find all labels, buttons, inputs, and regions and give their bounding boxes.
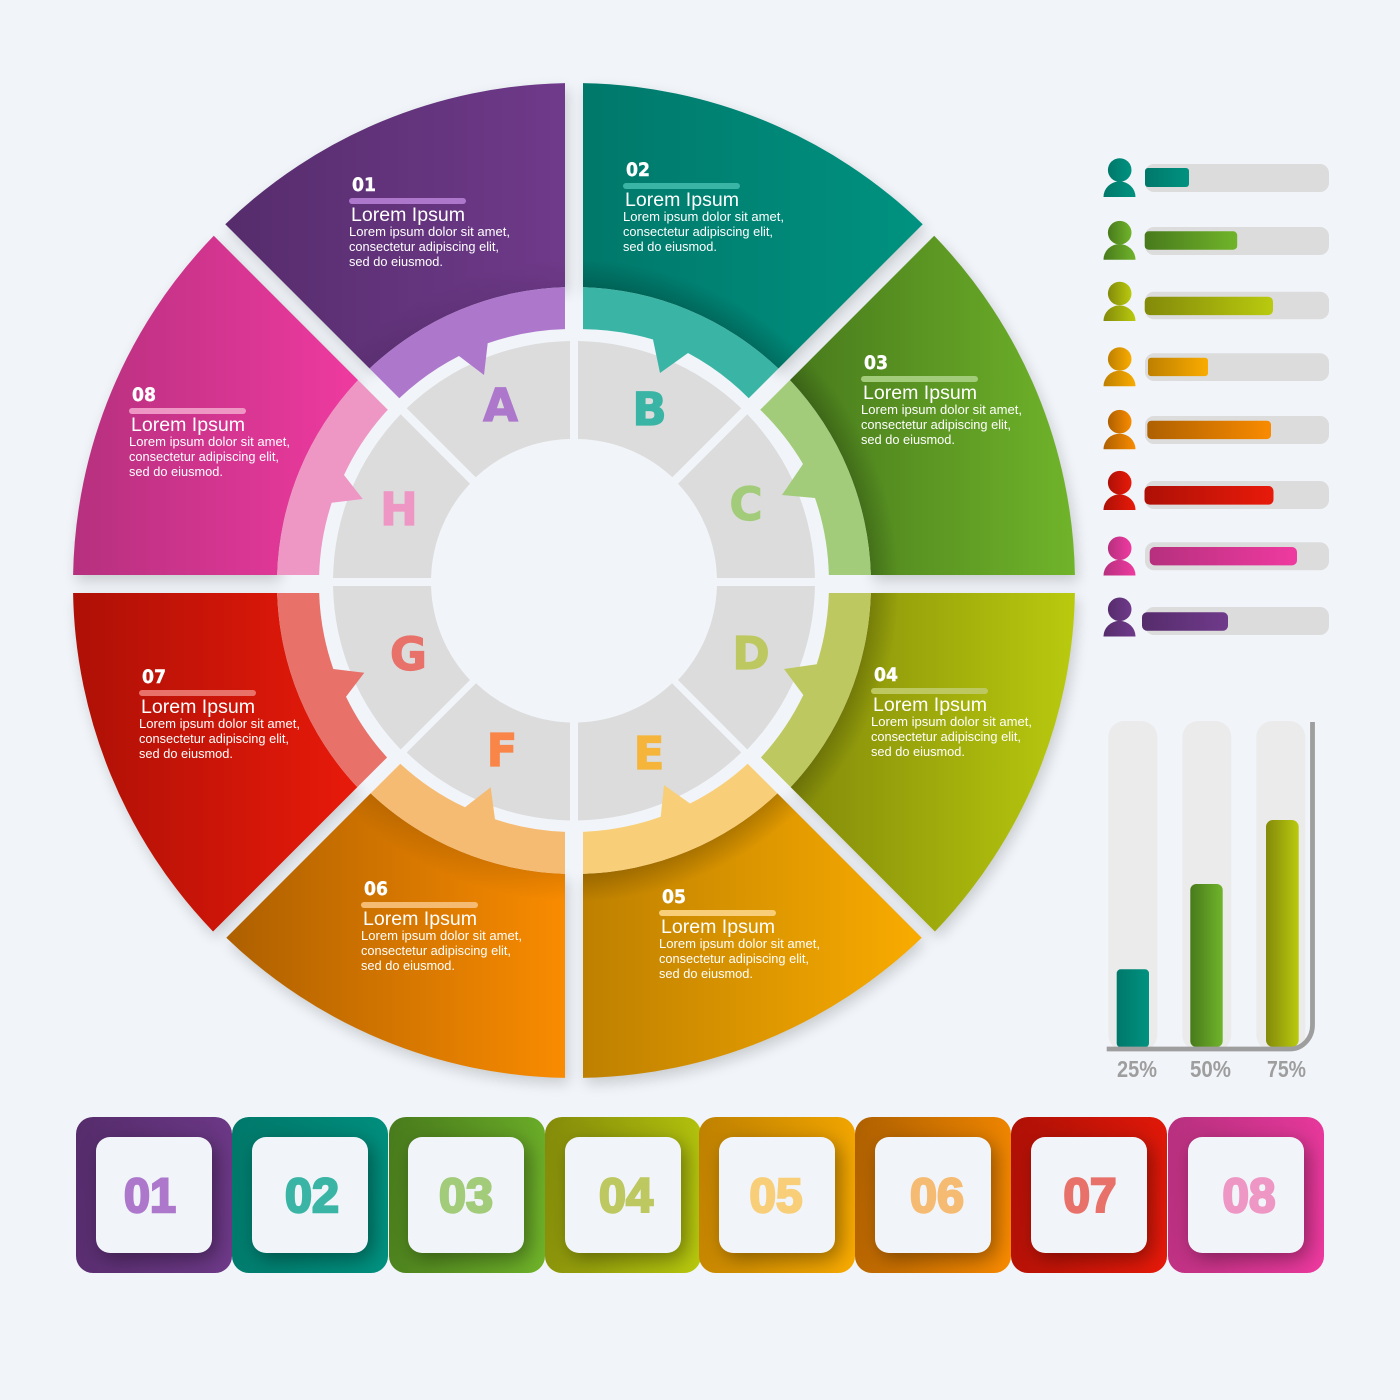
tile 01 — [76, 1117, 232, 1273]
text block: 05: consectetur adipiscing elit, — [659, 951, 809, 966]
text block: 08 — [129, 384, 290, 479]
band: segment G arrow ring — [277, 593, 387, 787]
column chart — [1107, 721, 1312, 1082]
column 75 percent: 75% — [1267, 1056, 1306, 1082]
tile 07 — [1011, 1117, 1167, 1273]
panel: segment 01 purple — [225, 83, 565, 398]
text block: 08: sed do eiusmod. — [129, 464, 223, 479]
text block: 03: sed do eiusmod. — [861, 432, 955, 447]
tile 05: 05 — [750, 1170, 802, 1223]
band: segment B arrow ring — [583, 287, 778, 398]
text block: 07: consectetur adipiscing elit, — [139, 731, 289, 746]
inner segment D — [678, 586, 815, 750]
people progress bars — [1104, 158, 1329, 636]
column 50 percent: 50% — [1190, 1056, 1231, 1082]
tile 08: 08 — [1222, 1170, 1276, 1223]
tile 02 — [232, 1117, 388, 1273]
text block: 02: consectetur adipiscing elit, — [623, 224, 773, 239]
tile 06: 06 — [910, 1170, 964, 1223]
text block: 03: Lorem ipsum dolor sit amet, — [861, 402, 1022, 417]
row 7 magenta — [1104, 536, 1329, 576]
text block: 08: consectetur adipiscing elit, — [129, 449, 279, 464]
tile 03 — [389, 1117, 545, 1273]
inner segment D: D — [732, 627, 770, 680]
panel: segment 03 green — [760, 236, 1075, 575]
inner segment A — [407, 341, 570, 477]
inner grey ring with letters — [333, 341, 815, 820]
panel: segment 02 teal — [583, 83, 923, 398]
panel: segment 07 red — [73, 593, 387, 931]
text block: 02: Lorem ipsum dolor sit amet, — [623, 209, 784, 224]
text block: 05: Lorem Ipsum — [661, 917, 775, 938]
inner segment B: B — [632, 383, 667, 436]
inner segment F — [407, 683, 570, 820]
text block: 04: Lorem Ipsum — [873, 695, 987, 716]
text block: 04: Lorem ipsum dolor sit amet, — [871, 714, 1032, 729]
text block: 02: 02 — [626, 159, 650, 181]
text block: 01: Lorem Ipsum — [351, 205, 465, 226]
row 8 purple — [1104, 598, 1329, 636]
panel: segment 08 magenta — [73, 236, 388, 575]
text block: 03: consectetur adipiscing elit, — [861, 417, 1011, 432]
tile 04 — [545, 1117, 701, 1273]
tile 03: 03 — [439, 1170, 493, 1223]
text block: 04 — [871, 664, 1032, 759]
inner segment A: A — [483, 379, 518, 432]
text block: 08: Lorem Ipsum — [131, 415, 245, 436]
row 2 green — [1104, 221, 1329, 260]
inner segment E: E — [634, 727, 664, 780]
text block: 06: Lorem Ipsum — [363, 909, 477, 930]
panel: segment 06 orange — [226, 764, 565, 1078]
tile 05 — [699, 1117, 855, 1273]
column 25 percent: 25% — [1117, 1056, 1157, 1082]
text block: 06: sed do eiusmod. — [361, 958, 455, 973]
inner segment B — [578, 341, 741, 477]
band: segment E arrow ring — [583, 764, 777, 874]
tile 02: 02 — [285, 1170, 339, 1223]
text block: 02 — [623, 159, 784, 254]
band: segment D arrow ring — [761, 593, 871, 787]
column 50 percent — [1182, 721, 1231, 1082]
inner segment C — [678, 414, 815, 578]
text block: 06 — [361, 878, 522, 973]
band: segment F arrow ring — [371, 764, 565, 874]
tile 06 — [855, 1117, 1011, 1273]
text block: 05: 05 — [662, 886, 686, 908]
text block: 01 — [349, 174, 510, 269]
text block: 08: Lorem ipsum dolor sit amet, — [129, 434, 290, 449]
text block: 03: 03 — [864, 352, 888, 374]
text block: 04: sed do eiusmod. — [871, 744, 965, 759]
text block: 01: sed do eiusmod. — [349, 254, 443, 269]
band: segment A arrow ring — [370, 287, 565, 398]
row 4 amber — [1104, 347, 1329, 386]
text block: 07: Lorem Ipsum — [141, 697, 255, 718]
inner segment F: F — [487, 724, 517, 777]
chart axis — [1107, 722, 1312, 1049]
text block: 07 — [139, 666, 300, 761]
number tiles row — [76, 1117, 1324, 1273]
inner segment E — [578, 683, 741, 820]
tile 01: 01 — [124, 1170, 176, 1223]
band: segment H arrow ring — [277, 380, 388, 575]
inner segment H: H — [380, 483, 418, 536]
row 5 orange — [1104, 410, 1329, 449]
text block: 05 — [659, 886, 820, 981]
text block: 07: 07 — [142, 666, 166, 688]
text block: 02: Lorem Ipsum — [625, 190, 739, 211]
text block: 08: 08 — [132, 384, 156, 406]
tile 07: 07 — [1064, 1170, 1116, 1223]
text block: 01: Lorem ipsum dolor sit amet, — [349, 224, 510, 239]
inner segment G — [333, 586, 470, 750]
column 75 percent — [1256, 721, 1306, 1082]
text block: 04: 04 — [874, 664, 898, 686]
text block: 05: sed do eiusmod. — [659, 966, 753, 981]
column 25 percent — [1108, 721, 1157, 1082]
text block: 07: Lorem ipsum dolor sit amet, — [139, 716, 300, 731]
text block: 02: sed do eiusmod. — [623, 239, 717, 254]
text block: 06: consectetur adipiscing elit, — [361, 943, 511, 958]
row 6 red — [1104, 471, 1329, 510]
panel: segment 05 amber — [583, 764, 922, 1078]
text block: 07: sed do eiusmod. — [139, 746, 233, 761]
row 1 teal — [1104, 158, 1329, 197]
tile 04: 04 — [599, 1170, 653, 1223]
tile 08 — [1168, 1117, 1324, 1273]
panel: segment 04 olive — [761, 593, 1075, 931]
text block: 03 — [861, 352, 1022, 447]
inner segment C: C — [729, 478, 763, 531]
text block: 03: Lorem Ipsum — [863, 383, 977, 404]
inner segment H — [333, 414, 470, 578]
text block: 06: Lorem ipsum dolor sit amet, — [361, 928, 522, 943]
text block: 06: 06 — [364, 878, 388, 900]
row 3 olive — [1104, 282, 1329, 321]
text block: 01: 01 — [352, 174, 376, 196]
band: segment C arrow ring — [760, 380, 871, 575]
text block: 04: consectetur adipiscing elit, — [871, 729, 1021, 744]
inner segment G: G — [390, 628, 427, 681]
text block: 01: consectetur adipiscing elit, — [349, 239, 499, 254]
text block: 05: Lorem ipsum dolor sit amet, — [659, 936, 820, 951]
